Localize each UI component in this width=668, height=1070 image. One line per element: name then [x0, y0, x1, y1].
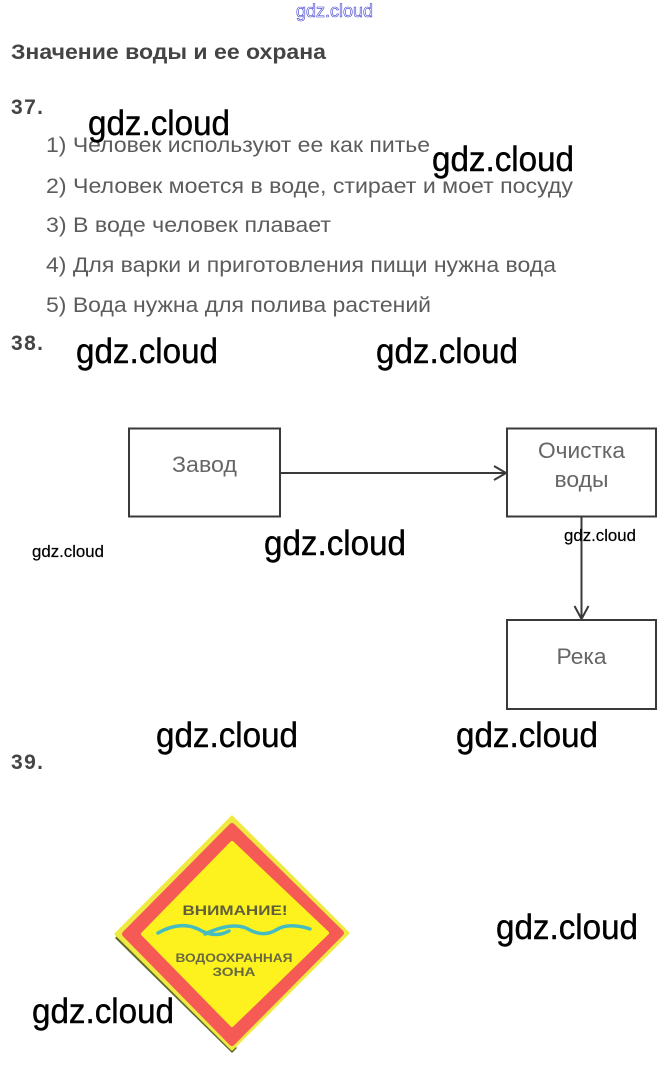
watermark 9: gdz.cloud: [32, 992, 174, 1031]
watermark small right: gdz.cloud: [564, 526, 636, 545]
watermark 2: gdz.cloud: [432, 140, 574, 179]
box: factory: Завод: [172, 452, 237, 477]
box: river: [507, 620, 656, 709]
answer 3: 3) В воде человек плавает: [46, 213, 331, 237]
arrow: treatment to river: [574, 517, 588, 619]
box: factory: [129, 428, 280, 516]
watermark 4: gdz.cloud: [376, 332, 518, 371]
watermark 1: gdz.cloud: [88, 104, 230, 143]
box: water treatment: [507, 428, 656, 516]
watermark small left: gdz.cloud: [32, 542, 104, 561]
watermark 8: gdz.cloud: [496, 908, 638, 947]
watermark 7: gdz.cloud: [456, 716, 598, 755]
sign yellow edge: [116, 817, 348, 1049]
box: water treatment: Очистка: [538, 438, 626, 463]
answer 2: 2) Человек моется в воде, стирает и моет посуду: [46, 174, 573, 198]
sign lower text: ВОДООХРАННАЯ: [176, 953, 292, 965]
answer list 37: [46, 133, 573, 317]
question number 38: 38.: [11, 332, 43, 355]
watermarks: [32, 104, 638, 1031]
sign heading: ВНИМАНИЕ!: [182, 903, 288, 918]
title: Значение воды и ее охрана: [11, 41, 326, 64]
sign shadow: [116, 934, 236, 1052]
arrow: factory to treatment: [280, 466, 506, 480]
answer 1: 1) Человек используют ее как питье: [46, 133, 430, 157]
watermark 3: gdz.cloud: [76, 332, 218, 371]
sign yellow centre: [143, 843, 327, 1025]
box: river: Река: [556, 644, 607, 669]
sign waves: [158, 926, 310, 935]
watermark 6: gdz.cloud: [156, 716, 298, 755]
watermark 5: gdz.cloud: [264, 524, 406, 563]
sign lower text second line: ЗОНА: [212, 967, 256, 979]
sign red border: [125, 826, 341, 1043]
answer 4: 4) Для варки и приготовления пищи нужна вода: [46, 253, 556, 277]
watermark: top outlined: gdz.cloud: [296, 1, 373, 21]
question number 37: 37.: [11, 96, 43, 119]
icon: water protection zone sign: [116, 817, 348, 1052]
answer 5: 5) Вода нужна для полива растений: [46, 293, 431, 317]
flow diagram: [129, 428, 656, 709]
question number 39: 39.: [11, 751, 43, 774]
box: water treatment: воды: [554, 467, 608, 492]
